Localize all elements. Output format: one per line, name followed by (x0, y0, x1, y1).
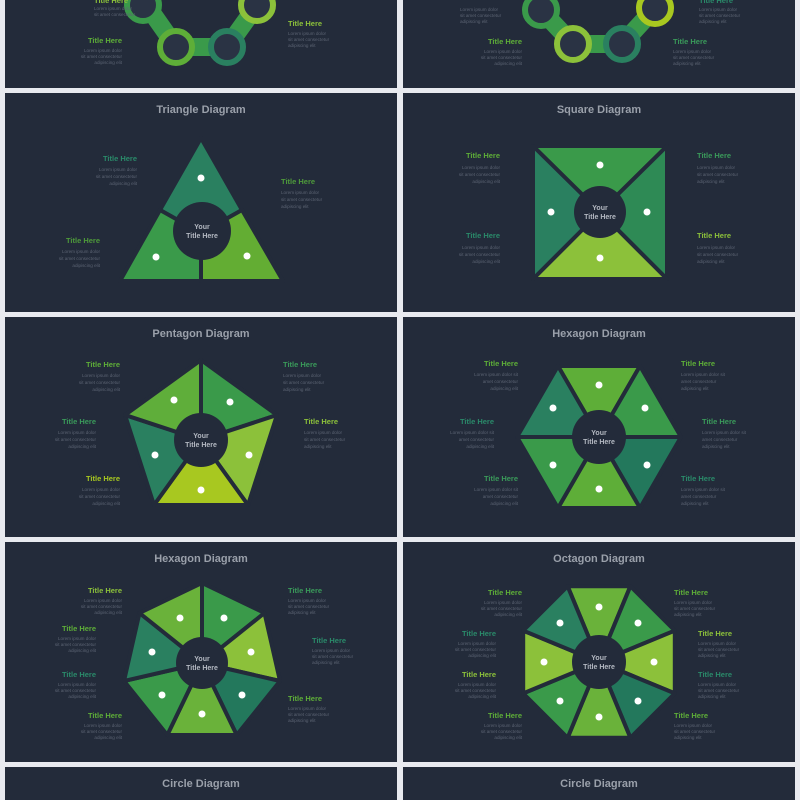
panel: top-right chain diagram: sit amet consectetur (673, 55, 715, 60)
panel: octagon diagram: adipiscing elit (674, 612, 702, 617)
panel: octagon diagram: Lorem ipsum dolor (484, 723, 522, 728)
panel: pentagon diagram (55, 328, 346, 506)
heading: hexagon: Hexagon Diagram (552, 328, 646, 340)
panel: heptagon diagram (left, titled Hexagon): Lorem ipsum dolor (288, 706, 327, 711)
panel: octagon diagram: Lorem ipsum dolor (458, 641, 496, 646)
panel: pentagon diagram: Lorem ipsum dolor (82, 487, 120, 492)
panel: pentagon diagram: Lorem ipsum dolor (304, 430, 343, 435)
panel: octagon diagram: Title Here (698, 670, 732, 679)
panel: square diagram: Title Here (466, 231, 500, 240)
panel: top-right chain diagram: adipiscing elit (699, 19, 727, 24)
panel: pentagon diagram: Title Here (86, 474, 120, 483)
panel: heptagon diagram (left, titled Hexagon): sit amet consectetur (81, 729, 122, 734)
panel: hexagon diagram (right): amet consectetur (483, 379, 518, 384)
panel: octagon diagram: Title Here (698, 629, 732, 638)
panel: octagon diagram: adipiscing elit (674, 735, 702, 740)
panel: hexagon diagram (right): Lorem ipsum dolor sit (681, 487, 726, 492)
panel: hexagon diagram (right): Lorem ipsum dolor sit (450, 430, 495, 435)
panel: heptagon diagram (left, titled Hexagon): Title Here (62, 670, 96, 679)
panel: square diagram: adipiscing elit (697, 179, 725, 184)
panel: top-left chain diagram: Lorem ipsum dolor (94, 6, 133, 11)
panel: heptagon diagram (left, titled Hexagon): Title Here (88, 711, 122, 720)
panel: square diagram: Lorem ipsum dolor (462, 245, 500, 250)
panel: octagon diagram: adipiscing elit (698, 653, 726, 658)
panel: octagon diagram: adipiscing elit (494, 612, 523, 617)
panel: heptagon diagram (left, titled Hexagon): sit amet consectetur (81, 604, 122, 609)
panel: square diagram: Title Here (697, 151, 731, 160)
panel: heptagon diagram (left, titled Hexagon): Your (194, 656, 210, 663)
panel: square diagram: sit amet consectetur (459, 172, 500, 177)
panel: hexagon diagram (right): adipiscing elit (466, 444, 495, 449)
panel: top-right chain diagram: adipiscing elit (460, 19, 488, 24)
panel: octagon diagram: Title Here (488, 588, 522, 597)
panel: top-right chain diagram: Lorem ipsum dolor (460, 7, 499, 12)
panel: top-right chain diagram: sit amet consectetur (460, 13, 502, 18)
panel: octagon diagram: Lorem ipsum dolor (674, 600, 713, 605)
panel: hexagon diagram (right): Your (591, 430, 607, 437)
panel: hexagon diagram (right) (450, 328, 747, 508)
panel: pentagon diagram: Title Here (185, 442, 217, 449)
panel: octagon diagram: Lorem ipsum dolor (698, 641, 737, 646)
heading: circle diagram left: Circle Diagram (162, 778, 240, 790)
panel: heptagon diagram (left, titled Hexagon): Title Here (288, 694, 322, 703)
panel: octagon diagram: sit amet consectetur (698, 688, 740, 693)
panel: heptagon diagram (left, titled Hexagon): Title Here (186, 665, 218, 672)
panel: square diagram: Title Here (584, 214, 616, 221)
panel: octagon diagram: Title Here (674, 588, 708, 597)
panel: square diagram: adipiscing elit (472, 259, 501, 264)
panel: top-left chain diagram: Title Here (88, 36, 122, 45)
panel: hexagon diagram (right): Title Here (484, 474, 518, 483)
heading: circle diagram right: Circle Diagram (560, 778, 638, 790)
panel: triangle diagram: adipiscing elit (109, 181, 138, 186)
panel: hexagon diagram (right): adipiscing elit (490, 386, 519, 391)
panel: top-right chain diagram: adipiscing elit (673, 61, 701, 66)
panel: heptagon diagram (left, titled Hexagon) (55, 553, 354, 740)
panel: pentagon diagram: sit amet consectetur (55, 437, 96, 442)
panel: triangle diagram: sit amet consectetur (59, 256, 100, 261)
panel: octagon diagram: adipiscing elit (698, 694, 726, 699)
panel: triangle diagram: Title Here (66, 236, 100, 245)
panel: square diagram: Title Here (466, 151, 500, 160)
panel: octagon diagram: sit amet consectetur (674, 606, 716, 611)
panel: heptagon diagram (left, titled Hexagon): sit amet consectetur (55, 688, 96, 693)
panel: heptagon diagram (left, titled Hexagon): Lorem ipsum dolor (312, 648, 351, 653)
panel: triangle diagram: adipiscing elit (281, 204, 309, 209)
panel: square diagram: Lorem ipsum dolor (697, 245, 736, 250)
panel: hexagon diagram (right): amet consectetur (459, 437, 494, 442)
panel: top-left chain diagram: sit amet consectetur (81, 54, 122, 59)
panel: triangle diagram (59, 104, 323, 281)
panel: octagon diagram: Lorem ipsum dolor (458, 682, 496, 687)
panel: pentagon diagram: adipiscing elit (304, 444, 332, 449)
heading: triangle: Triangle Diagram (156, 104, 246, 116)
panel: hexagon diagram (right): adipiscing elit (702, 444, 730, 449)
panel: square diagram: Lorem ipsum dolor (697, 165, 736, 170)
panel: hexagon diagram (right): Lorem ipsum dolor sit (681, 372, 726, 377)
panel: octagon diagram: Title Here (583, 664, 615, 671)
panel: heptagon diagram (left, titled Hexagon): Lorem ipsum dolor (58, 636, 96, 641)
panel: square diagram: sit amet consectetur (459, 252, 500, 257)
panel: top-left chain diagram: adipiscing elit (94, 60, 123, 65)
panel: heptagon diagram (left, titled Hexagon): sit amet consectetur (288, 712, 330, 717)
panel: top-left chain diagram: sit amet consectetur (288, 37, 330, 42)
panel: pentagon diagram: Lorem ipsum dolor (58, 430, 96, 435)
panel: octagon diagram: sit amet consectetur (455, 688, 496, 693)
panel: octagon diagram: sit amet consectetur (455, 647, 496, 652)
panel: hexagon diagram (right): amet consectetur (681, 494, 717, 499)
panel: pentagon diagram: sit amet consectetur (79, 380, 120, 385)
panel: octagon diagram: sit amet consectetur (481, 606, 522, 611)
panel: triangle diagram: Title Here (186, 233, 218, 240)
panel: heptagon diagram (left, titled Hexagon): Lorem ipsum dolor (84, 598, 122, 603)
panel: square diagram (459, 104, 739, 279)
panel: triangle diagram: Title Here (103, 154, 137, 163)
heading: square: Square Diagram (557, 104, 641, 116)
panel: hexagon diagram (right): Lorem ipsum dolor sit (474, 487, 519, 492)
panel: square diagram: Your (592, 205, 608, 212)
panel: octagon diagram: Title Here (674, 711, 708, 720)
heading: octagon: Octagon Diagram (553, 553, 645, 565)
panel: pentagon diagram: Title Here (283, 360, 317, 369)
panel: hexagon diagram (right): adipiscing elit (681, 501, 709, 506)
panel: triangle diagram: Lorem ipsum dolor (99, 167, 137, 172)
panel: octagon diagram: adipiscing elit (468, 694, 497, 699)
heading: pentagon: Pentagon Diagram (152, 328, 250, 340)
panel: hexagon diagram (right): adipiscing elit (681, 386, 709, 391)
panel: heptagon diagram (left, titled Hexagon): Lorem ipsum dolor (288, 598, 327, 603)
panel: pentagon diagram: adipiscing elit (92, 387, 121, 392)
panel: top-right chain diagram: Title Here (673, 37, 707, 46)
panel: pentagon diagram: adipiscing elit (68, 444, 97, 449)
panel: triangle diagram: sit amet consectetur (281, 197, 323, 202)
panel: heptagon diagram (left, titled Hexagon): adipiscing elit (94, 735, 123, 740)
panel: hexagon diagram (right): Lorem ipsum dolor sit (474, 372, 519, 377)
panel: triangle diagram: Lorem ipsum dolor (281, 190, 320, 195)
panel: hexagon diagram (right): Title Here (484, 359, 518, 368)
panel: top-right chain diagram: Lorem ipsum dolor (699, 7, 738, 12)
panel: heptagon diagram (left, titled Hexagon): Title Here (312, 636, 346, 645)
panel: hexagon diagram (right): amet consectetur (681, 379, 717, 384)
panel: top-left chain diagram (81, 0, 330, 65)
panel: octagon diagram: sit amet consectetur (481, 729, 522, 734)
panel: top-right chain diagram (460, 0, 741, 66)
panel: square diagram: adipiscing elit (472, 179, 501, 184)
panel: octagon diagram: adipiscing elit (468, 653, 497, 658)
panel: top-right chain diagram: Lorem ipsum dolor (484, 49, 522, 54)
panel: heptagon diagram (left, titled Hexagon): sit amet consectetur (55, 642, 96, 647)
panel: heptagon diagram (left, titled Hexagon): Title Here (88, 586, 122, 595)
panel: pentagon diagram: Title Here (86, 360, 120, 369)
panel: octagon diagram: sit amet consectetur (674, 729, 716, 734)
panel: octagon diagram: adipiscing elit (494, 735, 523, 740)
panel: hexagon diagram (right): Title Here (702, 417, 736, 426)
panel: top-right chain diagram: adipiscing elit (494, 61, 523, 66)
panel: triangle diagram: adipiscing elit (72, 263, 101, 268)
panel: square diagram: sit amet consectetur (697, 252, 739, 257)
panel: hexagon diagram (right): adipiscing elit (490, 501, 519, 506)
panel: heptagon diagram (left, titled Hexagon): Title Here (288, 586, 322, 595)
panel: triangle diagram: Title Here (281, 177, 315, 186)
panel: heptagon diagram (left, titled Hexagon): adipiscing elit (68, 648, 97, 653)
panel: triangle diagram: sit amet consectetur (96, 174, 137, 179)
panel: hexagon diagram (right): Title Here (460, 417, 494, 426)
panel: pentagon diagram: Lorem ipsum dolor (283, 373, 322, 378)
heading: heptagon: Hexagon Diagram (154, 553, 248, 565)
panel: top-right chain diagram: Lorem ipsum dolor (673, 49, 712, 54)
panel: hexagon diagram (right): Title Here (583, 439, 615, 446)
panel: octagon diagram: Lorem ipsum dolor (698, 682, 737, 687)
panel: hexagon diagram (right): Title Here (681, 359, 715, 368)
panel: top-left chain diagram: Lorem ipsum dolor (84, 48, 122, 53)
panel: hexagon diagram (right): amet consectetur (702, 437, 738, 442)
panel: square diagram: sit amet consectetur (697, 172, 739, 177)
panel: heptagon diagram (left, titled Hexagon): adipiscing elit (312, 660, 340, 665)
panel: pentagon diagram: Your (193, 433, 209, 440)
panel: pentagon diagram: adipiscing elit (283, 387, 311, 392)
panel: pentagon diagram: sit amet consectetur (79, 494, 120, 499)
panel: heptagon diagram (left, titled Hexagon): adipiscing elit (94, 610, 123, 615)
panel: heptagon diagram (left, titled Hexagon): Title Here (62, 624, 96, 633)
panel: triangle diagram: Your (194, 224, 210, 231)
panel: pentagon diagram: Lorem ipsum dolor (82, 373, 120, 378)
panel: heptagon diagram (left, titled Hexagon): adipiscing elit (288, 718, 316, 723)
panel: square diagram: Lorem ipsum dolor (462, 165, 500, 170)
panel: pentagon diagram: adipiscing elit (92, 501, 121, 506)
panel: top-left chain diagram: Lorem ipsum dolor (288, 31, 327, 36)
panel: octagon diagram: Title Here (462, 670, 496, 679)
panel: heptagon diagram (left, titled Hexagon): Lorem ipsum dolor (84, 723, 122, 728)
panel: octagon diagram: Title Here (488, 711, 522, 720)
panel: square diagram: adipiscing elit (697, 259, 725, 264)
panel: octagon diagram: Title Here (462, 629, 496, 638)
panel: top-right chain diagram: sit amet consectetur (481, 55, 522, 60)
panel: triangle diagram: Lorem ipsum dolor (62, 249, 100, 254)
panel: heptagon diagram (left, titled Hexagon): sit amet consectetur (312, 654, 354, 659)
panel: top-left chain diagram: sit amet consectetur (94, 12, 136, 17)
panel: octagon diagram: Your (591, 655, 607, 662)
panel: octagon diagram: sit amet consectetur (698, 647, 740, 652)
panel: top-right chain diagram: Title Here (488, 37, 522, 46)
panel: octagon diagram (455, 553, 740, 740)
panel: square diagram: Title Here (697, 231, 731, 240)
panel: top-left chain diagram: Title Here (288, 19, 322, 28)
panel: octagon diagram: Lorem ipsum dolor (674, 723, 713, 728)
panel: pentagon diagram: Title Here (62, 417, 96, 426)
panel: pentagon diagram: Title Here (304, 417, 338, 426)
panel: octagon diagram: Lorem ipsum dolor (484, 600, 522, 605)
panel: hexagon diagram (right): Lorem ipsum dolor sit (702, 430, 747, 435)
panel: pentagon diagram: sit amet consectetur (304, 437, 346, 442)
panel: top-left chain diagram: adipiscing elit (288, 43, 316, 48)
panel: heptagon diagram (left, titled Hexagon): sit amet consectetur (288, 604, 330, 609)
panel: heptagon diagram (left, titled Hexagon): adipiscing elit (68, 694, 97, 699)
panel: hexagon diagram (right): amet consectetur (483, 494, 518, 499)
panel: hexagon diagram (right): Title Here (681, 474, 715, 483)
panel: heptagon diagram (left, titled Hexagon): Lorem ipsum dolor (58, 682, 96, 687)
panel: pentagon diagram: sit amet consectetur (283, 380, 325, 385)
panel: heptagon diagram (left, titled Hexagon): adipiscing elit (288, 610, 316, 615)
panel: top-right chain diagram: sit amet consectetur (699, 13, 741, 18)
